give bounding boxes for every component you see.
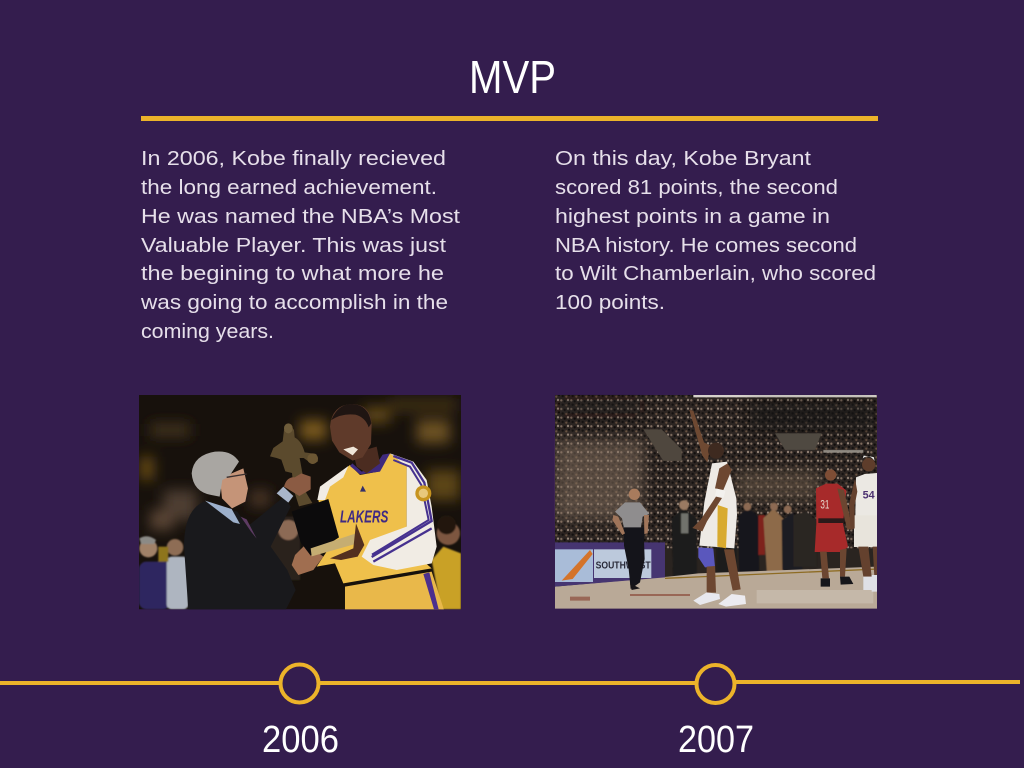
text block: 81 points description [555,148,876,314]
text block: 2006 MVP description [140,148,461,343]
opposing player in red: 31 [820,497,830,511]
marker: 2006 [280,664,318,702]
year label: 2006: 2006 [262,719,339,761]
scorer's table: SOUTHWEST [596,561,651,572]
text block: 2006 MVP description: He was named the NBA’s Most [141,206,461,228]
text block: 2006 MVP description: was going to accomplish in the [140,292,448,314]
Kobe jersey: LAKERS [340,506,388,526]
text block: 2006 MVP description: In 2006, Kobe finally recieved [141,148,446,170]
title: MVP [469,51,556,103]
text block: 2006 MVP description: the long earned achievement. [141,177,437,199]
photo: Kobe salutes the crowd after 81 points [555,395,878,609]
opposing player in red [815,469,853,587]
sideline officials [672,500,817,577]
sleeve stripes [372,456,432,557]
spectators [139,516,461,609]
heading underline [141,116,878,121]
text block: 81 points description: to Wilt Chamberlain, who scored [555,263,876,285]
text block: 2006 MVP description: Valuable Player. This was just [141,235,447,257]
torso [317,453,432,583]
floor [555,567,877,609]
referee [612,489,649,590]
text block: 81 points description: 100 points. [555,292,665,314]
text block: 2006 MVP description: coming years. [141,321,274,343]
Kobe jersey [317,404,444,610]
text block: 81 points description: On this day, Kobe Bryant [555,148,812,170]
shorts [345,572,444,610]
arena aisles [643,429,682,461]
man in suit [184,451,323,610]
sleeve [362,453,437,570]
Kobe [689,410,746,607]
year label: 2007: 2007 [678,719,754,761]
trophy [270,423,318,506]
text block: 81 points description: NBA history. He comes second [555,235,857,257]
photo: Kobe receiving MVP trophy [139,395,461,610]
neck [353,447,380,473]
teammate number 54 [849,456,877,592]
collar [350,453,390,474]
scorer's table [555,542,665,587]
head [330,404,372,461]
timeline [0,664,1020,703]
text block: 81 points description: scored 81 points, the second [555,177,838,199]
left shoulder [317,466,348,500]
text block: 2006 MVP description: the begining to what more he [141,263,444,285]
award box [292,499,364,560]
text block: 81 points description: highest points in a game in [555,206,830,228]
teammate number 54: 54 [863,489,875,501]
marker: 2007 [696,665,734,703]
